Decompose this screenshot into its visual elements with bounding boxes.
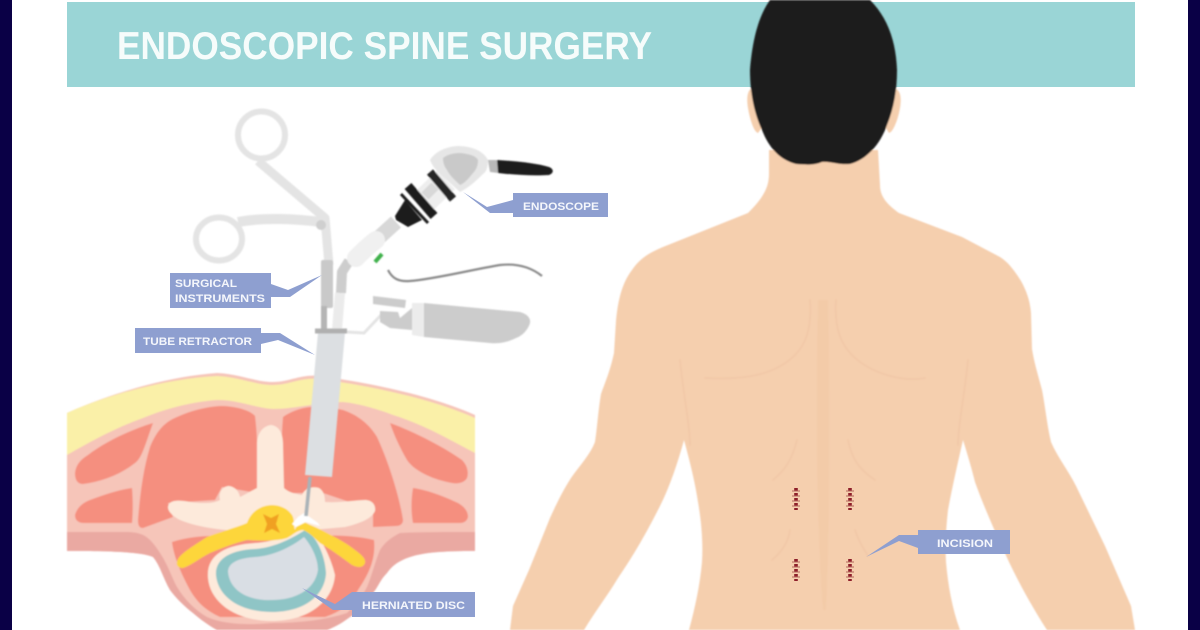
disc nucleus (228, 537, 318, 600)
label: surgical instruments: INSTRUMENTS (175, 293, 265, 305)
title: ENDOSCOPIC SPINE SURGERY (117, 25, 652, 68)
endoscope neck (374, 222, 396, 242)
vertebra bone (168, 425, 375, 531)
label: incision (866, 530, 1010, 557)
spinal cord (263, 514, 280, 533)
title banner (67, 2, 1135, 87)
label: tube retractor (135, 328, 315, 355)
endoscope head (430, 146, 488, 192)
surgical instruments (196, 112, 553, 516)
label: herniated disc: HERNIATED DISC (362, 600, 465, 612)
lower band (67, 532, 475, 630)
forceps (196, 112, 329, 265)
back shading (680, 300, 968, 560)
disc annulus (216, 530, 326, 612)
fat layer (67, 376, 475, 455)
label: surgical instruments: SURGICAL (175, 278, 237, 290)
incisions (792, 488, 854, 581)
label: endoscope: ENDOSCOPE (523, 201, 599, 213)
incision marks (796, 488, 850, 581)
retractor arm (347, 314, 382, 333)
tissue base (67, 373, 475, 630)
disc outer ring (208, 525, 335, 621)
spinal nerve (177, 505, 365, 568)
cable (388, 265, 542, 281)
retractor handle (424, 303, 530, 343)
label: surgical instruments (170, 273, 322, 308)
label: herniated disc (302, 588, 475, 617)
endoscope handle (488, 160, 498, 173)
spine cross-section (67, 373, 475, 630)
muscles (75, 406, 468, 617)
endoscope body (420, 180, 446, 205)
body (510, 150, 1135, 630)
patient back figure (510, 0, 1135, 630)
label: endoscope (463, 192, 608, 217)
ears (747, 88, 764, 133)
tube retractor (305, 333, 345, 477)
label: tube retractor: TUBE RETRACTOR (143, 336, 252, 348)
label: incision: INCISION (937, 538, 993, 550)
hair (750, 0, 897, 165)
second instrument (341, 261, 349, 293)
